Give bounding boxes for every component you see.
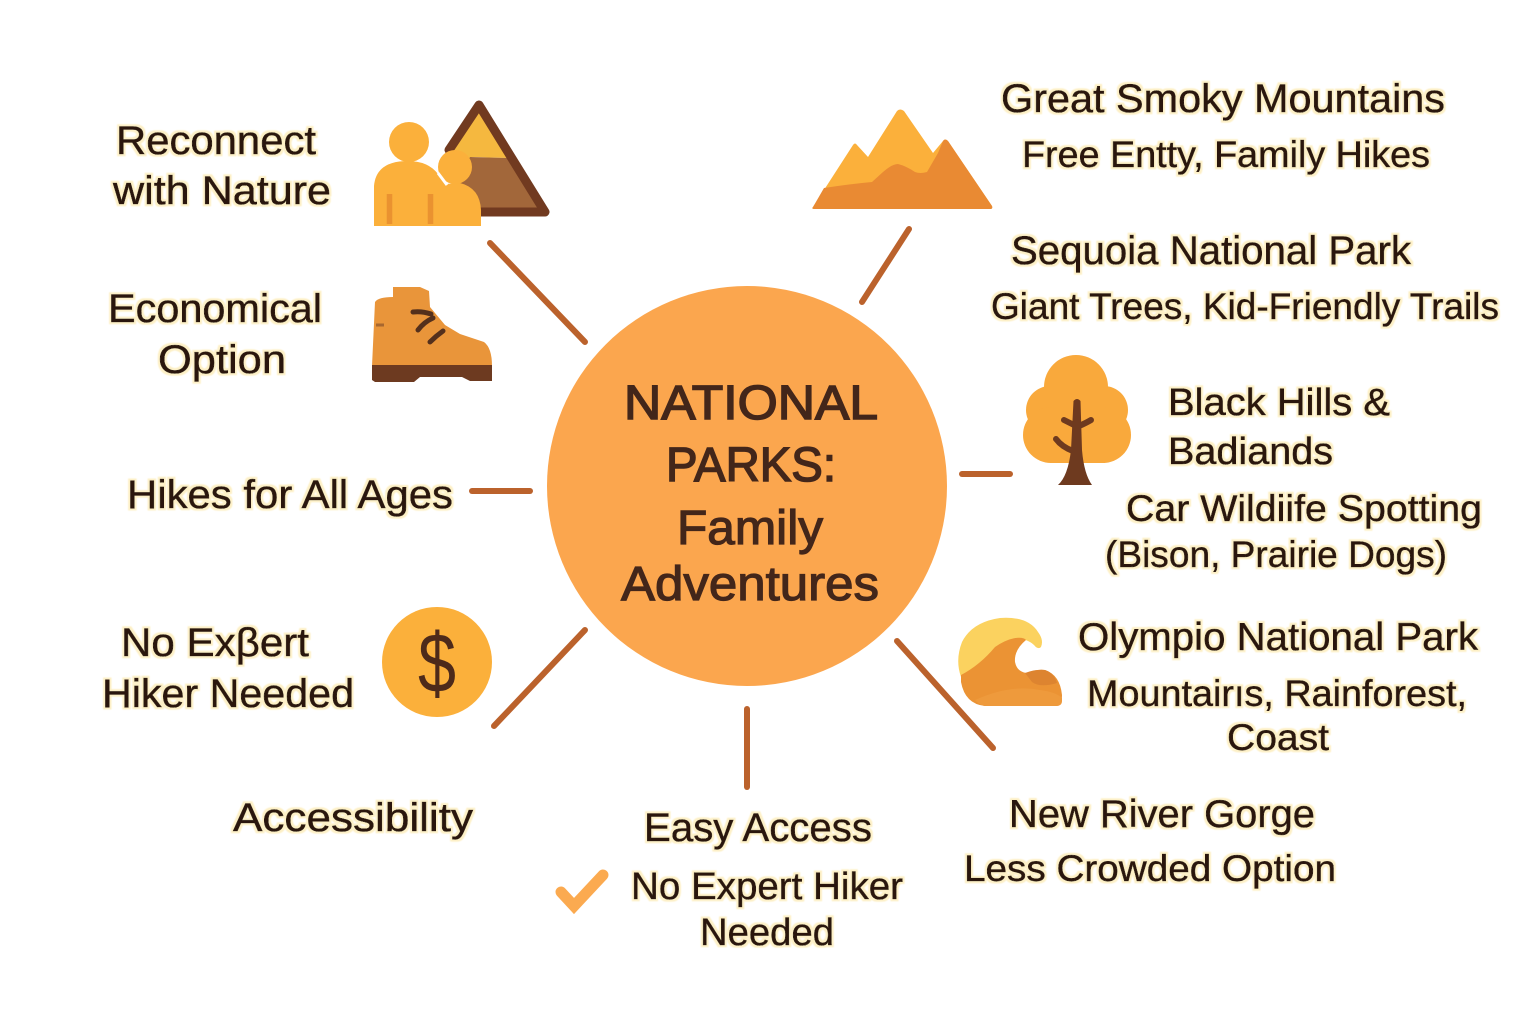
icon: wave: [958, 618, 1062, 706]
text: Black Hills & Badlands: [1105, 382, 1482, 575]
text: New River Gorge: [964, 793, 1336, 889]
icon: tree: [1023, 355, 1131, 485]
icon: hiking boot: [372, 287, 492, 382]
text: Reconnect with Nature: with Nature: [112, 169, 331, 213]
text: Economical Option: Option: [158, 338, 286, 382]
text: New River Gorge: New River Gorge: [1009, 793, 1315, 836]
text: Black Hills & Badlands: Black Hills &: [1168, 382, 1390, 424]
text: No Expert Hiker Needed: No Exβert: [121, 621, 309, 665]
text: Accessibility: Accessibility: [233, 796, 473, 840]
icon: mountains: [812, 110, 992, 209]
text: New River Gorge: Less Crowded Option: [964, 848, 1336, 889]
title: Family: [677, 502, 823, 555]
text: Olympic National Park: Olympio National Park: [1078, 616, 1479, 659]
text: No Expert Hiker Needed: [102, 621, 354, 716]
text: Reconnect with Nature: Reconnect: [116, 119, 316, 163]
text: Sequoia National Park: Sequoia National Park: [1011, 229, 1412, 273]
text: Olympic National Park: Mountairıs, Rainforest,: [1087, 673, 1467, 714]
text: Olympic National Park: Coast: [1227, 717, 1330, 758]
title: NATIONAL: [624, 377, 878, 430]
central circle: [547, 286, 947, 686]
text: No Expert Hiker Needed: Hiker Needed: [102, 672, 354, 716]
icon: dollar coin: $: [418, 616, 456, 710]
title: [621, 377, 879, 611]
text: Sequoia National Park: [991, 229, 1499, 327]
text: Sequoia National Park: Giant Trees, Kid-Friendly Trails: [991, 286, 1499, 327]
icon: check mark: [561, 875, 603, 906]
text: No Expert Hiker Needed detail: [631, 866, 903, 954]
text: Economical Option: Economical: [108, 287, 322, 331]
text: Olympic National Park: [1078, 616, 1479, 758]
text: Great Smoky Mountains: Great Smoky Mountains: [1001, 77, 1445, 121]
text: No Expert Hiker Needed detail: Needed: [700, 912, 834, 954]
icon: family and mountain: [374, 105, 545, 226]
text: Hikes for All Ages: Hikes for All Ages: [127, 473, 453, 517]
title: PARKS:: [666, 439, 836, 492]
text: Black Hills & Badlands: Badiands: [1168, 431, 1333, 473]
icon: dollar coin: [382, 607, 492, 717]
text: Great Smoky Mountains: [1001, 77, 1445, 175]
text: Black Hills & Badlands: (Bison, Prairie Dogs): [1105, 534, 1447, 575]
text: Great Smoky Mountains: Free Entty, Family Hikes: [1022, 134, 1430, 175]
text: No Expert Hiker Needed detail: No Expert Hiker: [631, 866, 903, 908]
title: Adventures: [621, 558, 879, 611]
text: Easy Access: Easy Access: [644, 806, 872, 850]
connector lines: [472, 229, 1010, 787]
text: Black Hills & Badlands: Car Wildiife Spotting: [1126, 488, 1482, 529]
text: Economical Option: [108, 287, 322, 382]
text: Reconnect with Nature: [112, 119, 331, 213]
